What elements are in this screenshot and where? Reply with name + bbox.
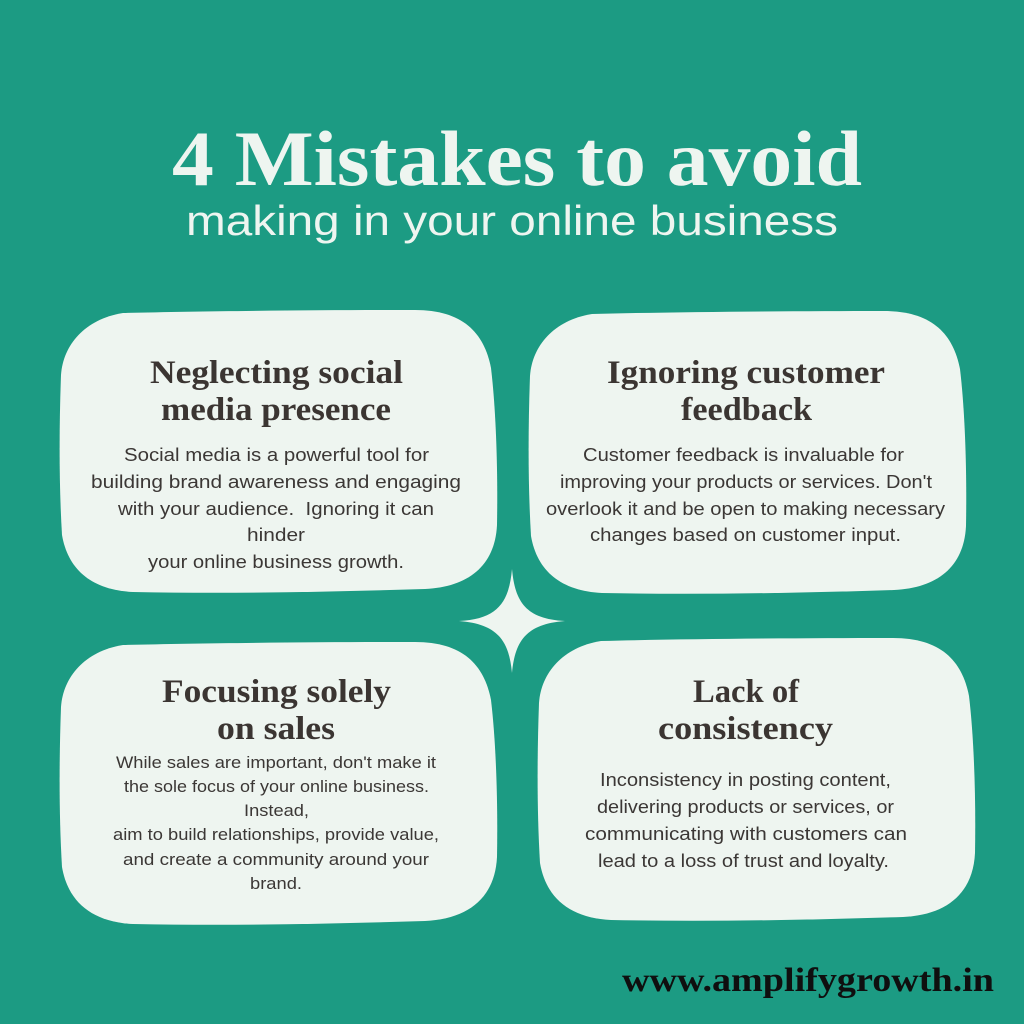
body text: building brand awareness and engaging — [91, 472, 461, 492]
body text: and create a community around your — [123, 850, 429, 869]
heading — [658, 674, 834, 747]
heading: consistency — [658, 711, 834, 747]
heading: Neglecting social — [150, 355, 403, 391]
body text: delivering products or services, or — [597, 797, 894, 817]
panel: neglecting social media presence — [60, 310, 497, 593]
body text: aim to build relationships, provide value, — [113, 825, 439, 844]
body text — [546, 445, 945, 545]
body text: lead to a loss of trust and loyalty. — [598, 851, 889, 871]
body text: the sole focus of your online business. — [124, 777, 429, 796]
heading: media presence — [161, 392, 391, 428]
website url: www.amplifygrowth.in — [622, 962, 994, 999]
heading — [607, 355, 885, 428]
body text — [585, 770, 907, 871]
body text — [113, 753, 439, 893]
panel: lack of consistency — [538, 638, 975, 921]
heading — [162, 674, 392, 747]
body text: overlook it and be open to making necessary — [546, 499, 945, 519]
body text: While sales are important, don't make it — [116, 753, 436, 772]
body text: brand. — [250, 874, 302, 893]
title: 4 Mistakes to avoid — [172, 115, 862, 202]
body text: improving your products or services. Don't — [560, 472, 932, 492]
heading: Ignoring customer — [607, 355, 885, 391]
heading: Focusing solely — [162, 674, 392, 710]
body text: communicating with customers can — [585, 824, 907, 844]
panel: ignoring customer feedback — [529, 311, 966, 594]
body text: Instead, — [244, 801, 309, 820]
heading: Lack of — [693, 674, 800, 710]
body text: hinder — [247, 525, 305, 545]
body text: changes based on customer input. — [590, 525, 901, 545]
icon: four-point star — [459, 569, 565, 673]
heading: on sales — [217, 711, 335, 747]
heading — [150, 355, 403, 428]
heading: feedback — [681, 392, 813, 428]
subtitle: making in your online business — [186, 197, 838, 244]
body text: with your audience. Ignoring it can — [117, 499, 434, 519]
body text: Social media is a powerful tool for — [124, 445, 429, 465]
body text: your online business growth. — [148, 552, 404, 572]
body text: Customer feedback is invaluable for — [583, 445, 904, 465]
body text — [91, 445, 461, 572]
panel: focusing solely on sales — [60, 642, 497, 925]
body text: Inconsistency in posting content, — [600, 770, 891, 790]
